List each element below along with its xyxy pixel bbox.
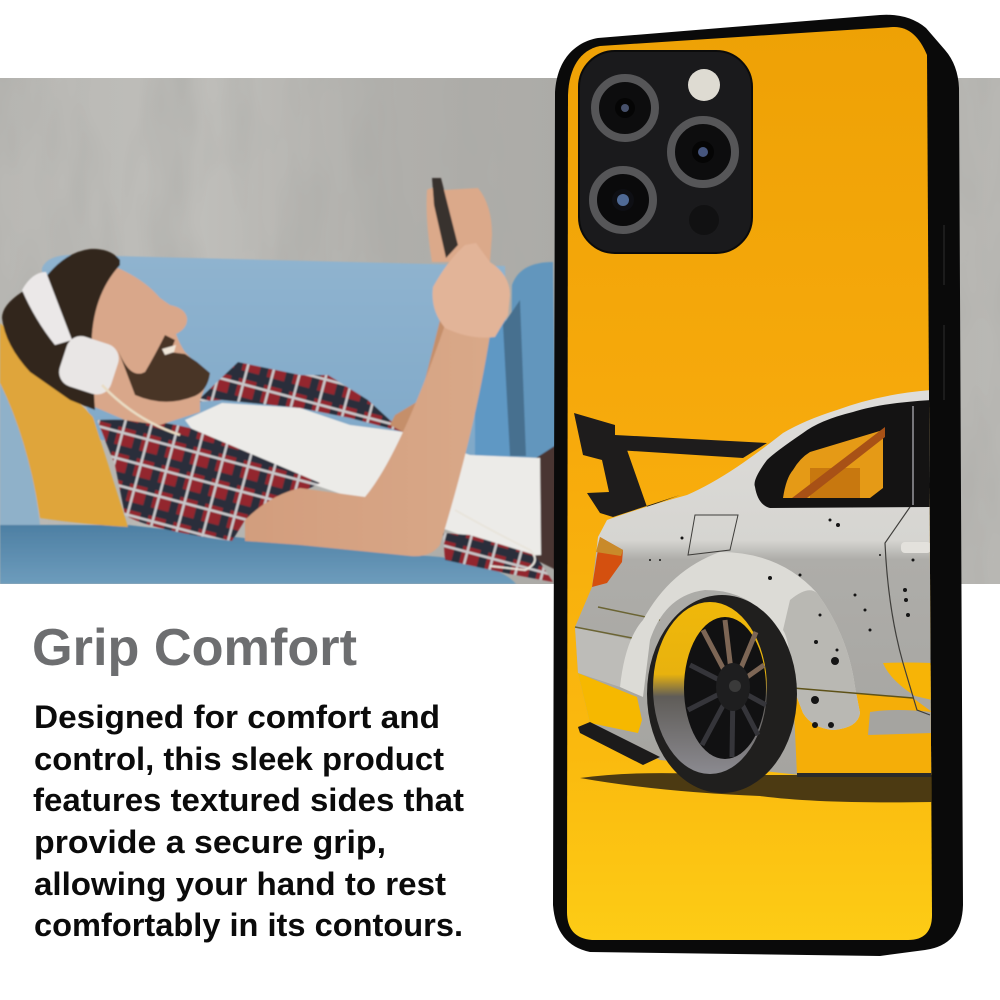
lifestyle photo band xyxy=(0,78,1000,584)
lens right xyxy=(671,120,735,184)
lens bottom left xyxy=(593,170,653,230)
body text: control, this sleek product xyxy=(34,741,444,777)
wheel xyxy=(647,595,797,793)
sensor xyxy=(689,205,719,235)
diffuser xyxy=(578,722,660,765)
phone case xyxy=(553,15,963,956)
spoiler xyxy=(574,413,767,517)
ground shadow xyxy=(580,773,935,802)
body text: allowing your hand to rest xyxy=(34,866,446,902)
man: shirt xyxy=(97,362,553,582)
body text: comfortably in its contours. xyxy=(34,907,463,943)
bumper grey xyxy=(575,627,632,687)
lens top left xyxy=(595,78,655,138)
window frame xyxy=(754,400,932,508)
man: arm and phone xyxy=(245,178,510,556)
body xyxy=(575,390,932,775)
side buttons xyxy=(943,225,945,400)
case screen artwork xyxy=(560,20,940,950)
pillow xyxy=(0,323,128,527)
man: trousers xyxy=(536,445,556,570)
man: head xyxy=(2,249,535,570)
camera island xyxy=(579,51,752,253)
body text xyxy=(33,699,464,943)
wall xyxy=(0,78,1000,584)
sofa xyxy=(0,255,556,584)
fender xyxy=(620,552,860,730)
car xyxy=(574,390,935,802)
headphones xyxy=(22,272,72,345)
body text: features textured sides that xyxy=(33,782,464,818)
body text: Designed for comfort and xyxy=(34,699,440,735)
lower paint xyxy=(793,688,932,775)
heading: Grip Comfort xyxy=(32,619,357,677)
flash xyxy=(688,69,720,101)
speckles xyxy=(649,518,914,728)
bumper yellow xyxy=(578,673,642,733)
door seam and handle xyxy=(885,507,930,715)
case body xyxy=(553,15,963,956)
body text: provide a secure grip, xyxy=(34,824,386,860)
taillight xyxy=(592,537,623,587)
fuel door xyxy=(688,515,738,555)
window glass xyxy=(783,430,883,498)
